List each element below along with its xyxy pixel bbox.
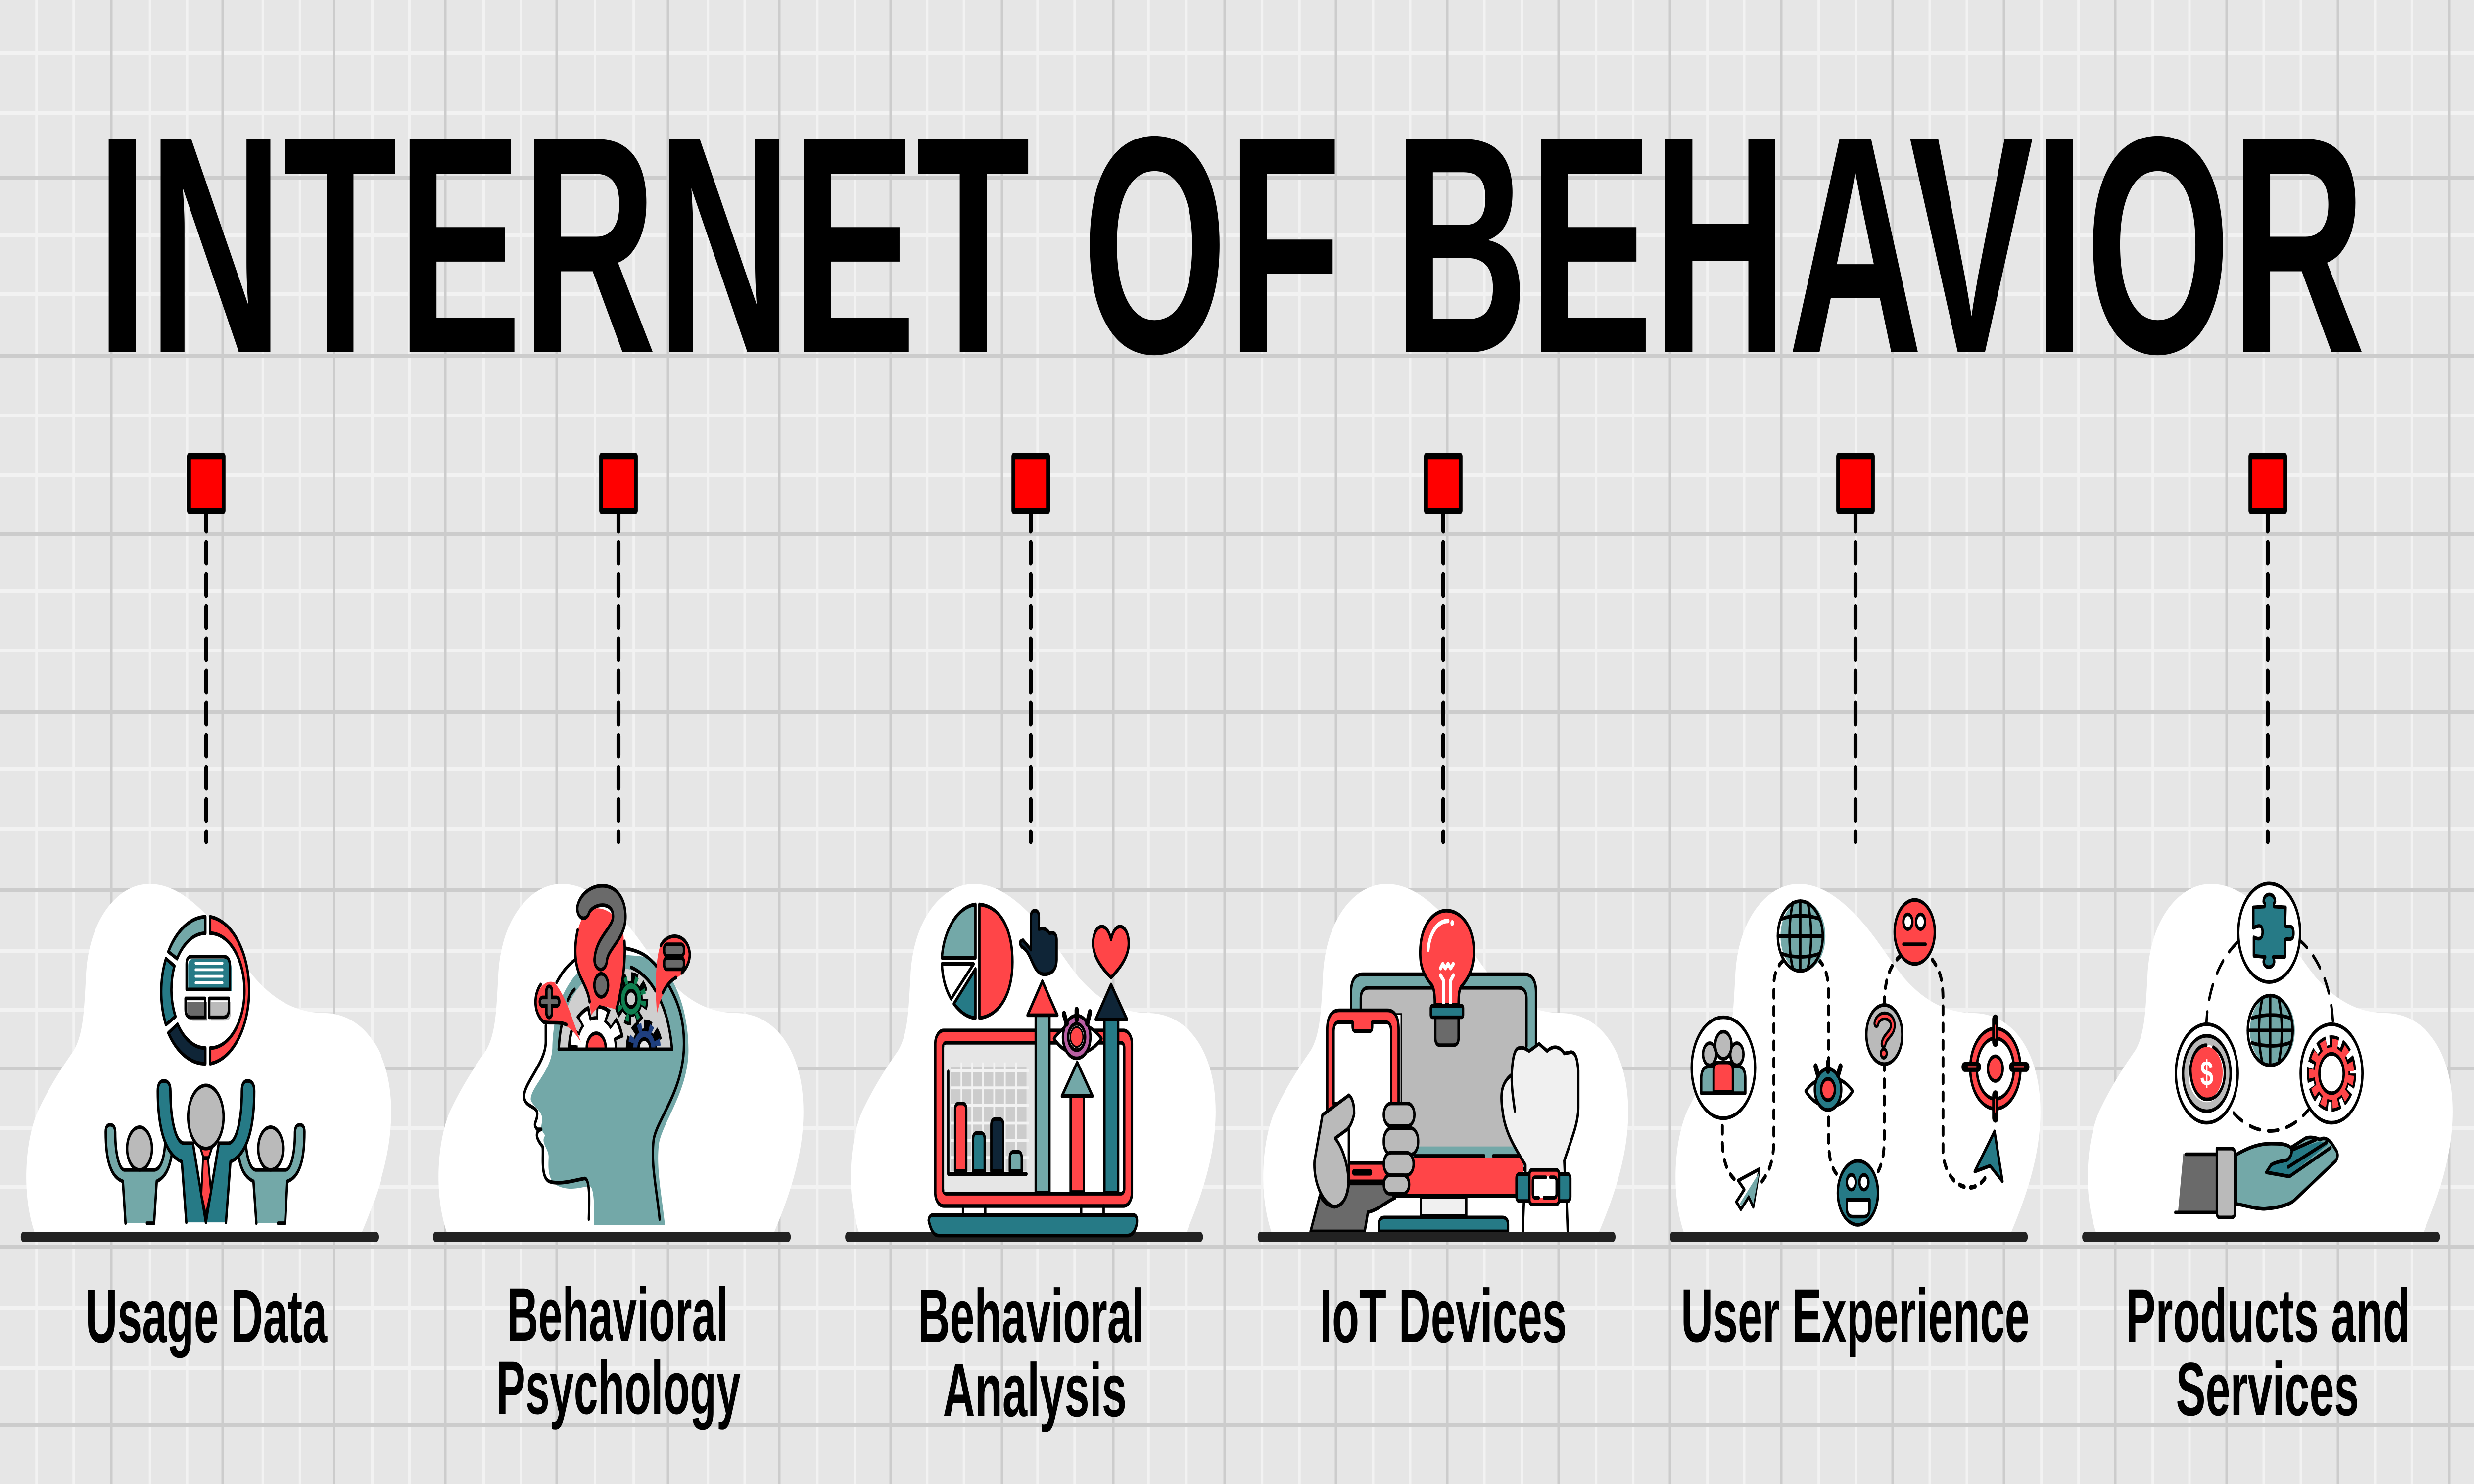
left person	[106, 1125, 172, 1223]
head fill	[531, 955, 688, 1225]
light bulb	[1420, 911, 1474, 1045]
head outline	[524, 948, 684, 1219]
pin marker	[1838, 456, 1873, 511]
red teardrop and question mark	[575, 895, 625, 1015]
happy face	[1838, 1161, 1878, 1225]
label: IoT Devices	[1320, 1273, 1567, 1358]
blob background	[26, 884, 391, 1232]
label line 2: Psychology	[496, 1346, 741, 1430]
icon: head with gears and question	[524, 895, 690, 1225]
laptop body	[935, 1030, 1132, 1206]
holding hand	[1314, 1095, 1418, 1207]
monitor	[1351, 974, 1536, 1231]
question circle	[1866, 1005, 1903, 1064]
dashed connector	[203, 511, 209, 841]
gear: blue	[625, 1019, 662, 1048]
icon: laptop with charts and arrows	[929, 905, 1137, 1236]
label: Usage Data	[86, 1273, 328, 1358]
label line 1: Behavioral	[918, 1274, 1144, 1358]
brain outline	[559, 967, 672, 1049]
blob background	[2088, 884, 2453, 1232]
dollar sign: $	[2200, 1053, 2213, 1093]
arrow up: light teal	[1028, 981, 1057, 1193]
arrow up: red	[1062, 1063, 1093, 1192]
panel: user experience	[1670, 456, 2041, 1358]
base line	[1258, 1232, 1616, 1242]
dashed connector	[1028, 511, 1034, 841]
pin marker	[1426, 456, 1461, 511]
cursor white	[1736, 1169, 1760, 1209]
dashed cycle	[2206, 928, 2333, 1131]
money circle	[2176, 1024, 2238, 1123]
pie chart	[942, 905, 1012, 1018]
panel: products and services	[2082, 456, 2453, 1432]
label line 1: Products and	[2126, 1273, 2410, 1358]
pin marker	[2250, 456, 2285, 511]
icon: people and data ring	[106, 917, 304, 1223]
dashed connector	[1853, 511, 1858, 841]
icon: hand with services	[2175, 883, 2363, 1217]
bar chart	[948, 1063, 1029, 1174]
pin marker	[189, 456, 224, 511]
sleeve	[1311, 1183, 1395, 1231]
dashed connector	[1440, 511, 1446, 841]
right person	[238, 1125, 304, 1223]
arrow up: teal	[1095, 984, 1127, 1193]
cursor teal	[1975, 1131, 2002, 1181]
data ring	[161, 917, 249, 1064]
dashed connector	[616, 511, 621, 841]
label line 1: Behavioral	[507, 1272, 728, 1357]
panel: behavioral analysis	[845, 456, 1216, 1433]
blob background	[438, 884, 804, 1232]
label: User Experience	[1681, 1273, 2030, 1358]
puzzle circle	[2238, 883, 2300, 982]
people circle	[1692, 1018, 1755, 1118]
icon: heart	[1093, 927, 1129, 977]
icon: devices, bulb and hands	[1311, 911, 1578, 1231]
sleeve and cuff	[2175, 1149, 2235, 1217]
base line	[845, 1232, 1203, 1242]
label line 2: Services	[2176, 1346, 2359, 1432]
gear: white	[568, 1005, 623, 1048]
laptop base	[929, 1215, 1137, 1236]
blob background	[851, 884, 1216, 1232]
left bubble with plus	[535, 982, 581, 1042]
neutral face	[1895, 900, 1935, 964]
dashed connector	[2265, 511, 2271, 841]
pin marker	[1013, 456, 1048, 511]
eye	[1806, 1063, 1853, 1110]
globe	[1778, 901, 1825, 971]
globe	[2248, 996, 2295, 1066]
panel: usage data	[21, 456, 391, 1358]
base line	[1670, 1232, 2028, 1242]
open hand	[2236, 1137, 2337, 1209]
base line	[433, 1232, 791, 1242]
icon: pointer hand	[1020, 911, 1056, 974]
laptop screen	[943, 1043, 1124, 1194]
brain fill	[559, 968, 672, 1049]
dashed journey path	[1722, 956, 1988, 1188]
hinges	[963, 1206, 1103, 1214]
right bubble with bars	[656, 936, 690, 1013]
panel: iot devices	[1258, 456, 1628, 1358]
title: INTERNET OF BEHAVIOR	[96, 72, 2366, 418]
smartphone	[1327, 1010, 1399, 1183]
blob background	[1675, 884, 2041, 1232]
center person	[158, 1081, 254, 1222]
eye	[1054, 1010, 1101, 1058]
icon: user journey	[1692, 900, 2026, 1225]
base line	[21, 1232, 379, 1242]
blob background	[1263, 884, 1628, 1232]
fist and arm	[1501, 1044, 1578, 1231]
label line 2: Analysis	[943, 1347, 1127, 1433]
gear: green	[618, 978, 644, 1020]
gear circle	[2301, 1024, 2363, 1123]
smartwatch	[1517, 1170, 1570, 1205]
pin marker	[601, 456, 636, 511]
target	[1965, 1020, 2026, 1118]
base line	[2082, 1232, 2440, 1242]
panel: behavioral psychology	[433, 456, 804, 1430]
